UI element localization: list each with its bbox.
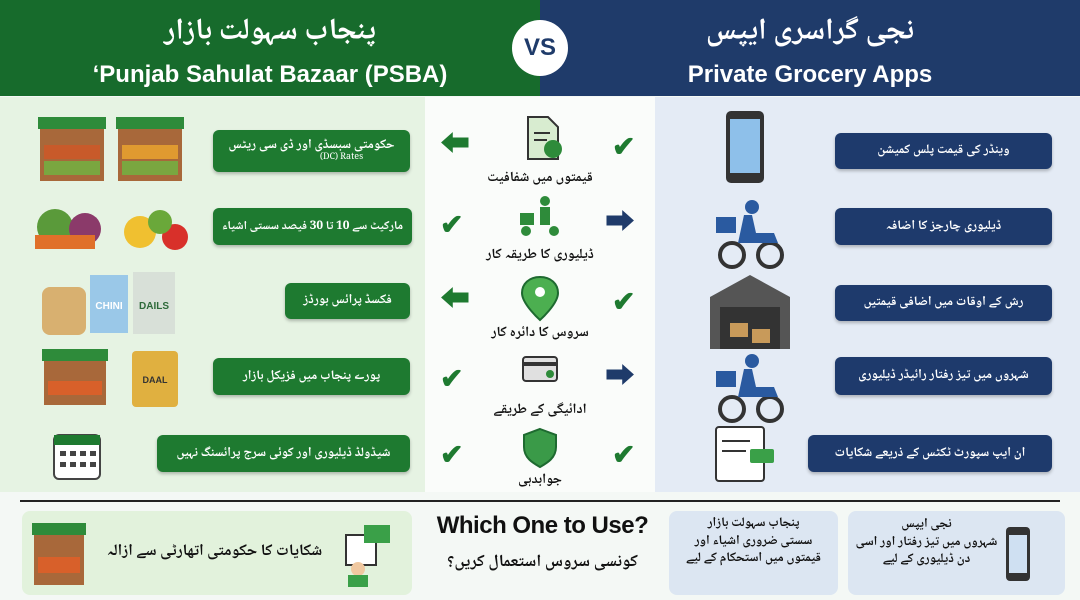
bottom panel: private apps: شہروں میں تیز رفتار اور اسی bbox=[856, 532, 997, 554]
text: شیڈولڈ ڈیلیوری اور کوئی سرج پرائسنگ نہیں bbox=[177, 442, 390, 464]
bottom panel: private apps bbox=[848, 511, 1065, 595]
left pills bbox=[213, 130, 410, 172]
bottom panel: PSBA bbox=[669, 511, 838, 595]
icons: left column bbox=[35, 117, 188, 480]
header: right navy: Private Grocery Apps bbox=[688, 61, 932, 88]
vs badge: VS bbox=[524, 34, 556, 61]
text: ✔ bbox=[440, 363, 463, 394]
text: مارکیٹ سے 10 تا 30 فیصد سستی اشیاء bbox=[222, 216, 403, 237]
text: ✔ bbox=[440, 439, 463, 470]
text: جوابدہی bbox=[518, 468, 562, 492]
text: ✔ bbox=[440, 209, 463, 240]
bottom panel: private apps: دن ڈیلیوری کے لیے bbox=[883, 549, 970, 571]
icons: left column: CHINI bbox=[95, 301, 123, 312]
header: left green: ‘Punjab Sahulat Bazaar (PSBA) bbox=[93, 61, 447, 88]
header: right navy bbox=[540, 0, 1080, 96]
text: ⬅ bbox=[440, 283, 470, 316]
bottom panel: complaints: شکایات کا حکومتی اتھارٹی سے ازالہ bbox=[107, 539, 322, 566]
bottom panel: PSBA: سستی ضروری اشیاء اور bbox=[695, 531, 812, 553]
header: left green: پنجاب سہولت بازار bbox=[164, 8, 376, 59]
vs badge bbox=[512, 20, 568, 76]
bottom panel: PSBA: قیمتوں میں استحکام کے لیے bbox=[686, 548, 821, 570]
text: ✔ bbox=[612, 131, 635, 162]
left pills: (DC) Rates bbox=[320, 149, 363, 165]
panel: right background bbox=[655, 97, 1080, 492]
bottom panel: complaints bbox=[22, 511, 412, 595]
text: ✔ bbox=[612, 286, 635, 317]
arrows and checks: ⬅ bbox=[440, 128, 470, 161]
text: ڈیلیوری کا طریقہ کار bbox=[486, 243, 594, 267]
center labels: قیمتوں میں شفافیت bbox=[487, 166, 593, 190]
icons: left column: DAAL bbox=[142, 375, 168, 385]
icons: right column bbox=[710, 111, 790, 482]
bottom title: Which One to Use? bbox=[437, 512, 648, 539]
icons: left column: DAILS bbox=[139, 301, 169, 312]
header: left green bbox=[0, 0, 540, 96]
panel: center background bbox=[425, 97, 655, 492]
bottom panel: private apps: نجی ایپس bbox=[901, 514, 952, 536]
right pills bbox=[835, 133, 1052, 169]
bottom title: کونسی سروس استعمال کریں؟ bbox=[447, 548, 638, 577]
text: پورے پنجاب میں فزیکل بازار bbox=[243, 366, 380, 388]
text: ان ایپ سپورٹ ٹکٹس کے ذریعے شکایات bbox=[835, 442, 1025, 464]
header: right navy: نجی گراسری ایپس bbox=[706, 8, 914, 59]
bottom title bbox=[436, 512, 648, 577]
panel: left background bbox=[0, 97, 425, 492]
bottom panel: PSBA: پنجاب سہولت بازار bbox=[708, 513, 799, 535]
text: فکسڈ پرائس بورڈز bbox=[303, 290, 392, 312]
right pills: وینڈر کی قیمت پلس کمیشن bbox=[877, 140, 1010, 162]
text: ادائیگی کے طریقے bbox=[493, 398, 587, 422]
text: سروس کا دائرہ کار bbox=[491, 321, 589, 345]
center icons bbox=[520, 116, 562, 468]
text: ➡ bbox=[605, 360, 635, 393]
left pills: حکومتی سبسڈی اور ڈی سی ریٹس bbox=[228, 135, 395, 157]
text: ➡ bbox=[605, 206, 635, 239]
text: رش کے اوقات میں اضافی قیمتیں bbox=[864, 292, 1023, 314]
text: شہروں میں تیز رفتار رائیڈر ڈیلیوری bbox=[858, 365, 1029, 387]
text: ✔ bbox=[612, 439, 635, 470]
text: ڈیلیوری چارجز کا اضافہ bbox=[886, 216, 1001, 238]
